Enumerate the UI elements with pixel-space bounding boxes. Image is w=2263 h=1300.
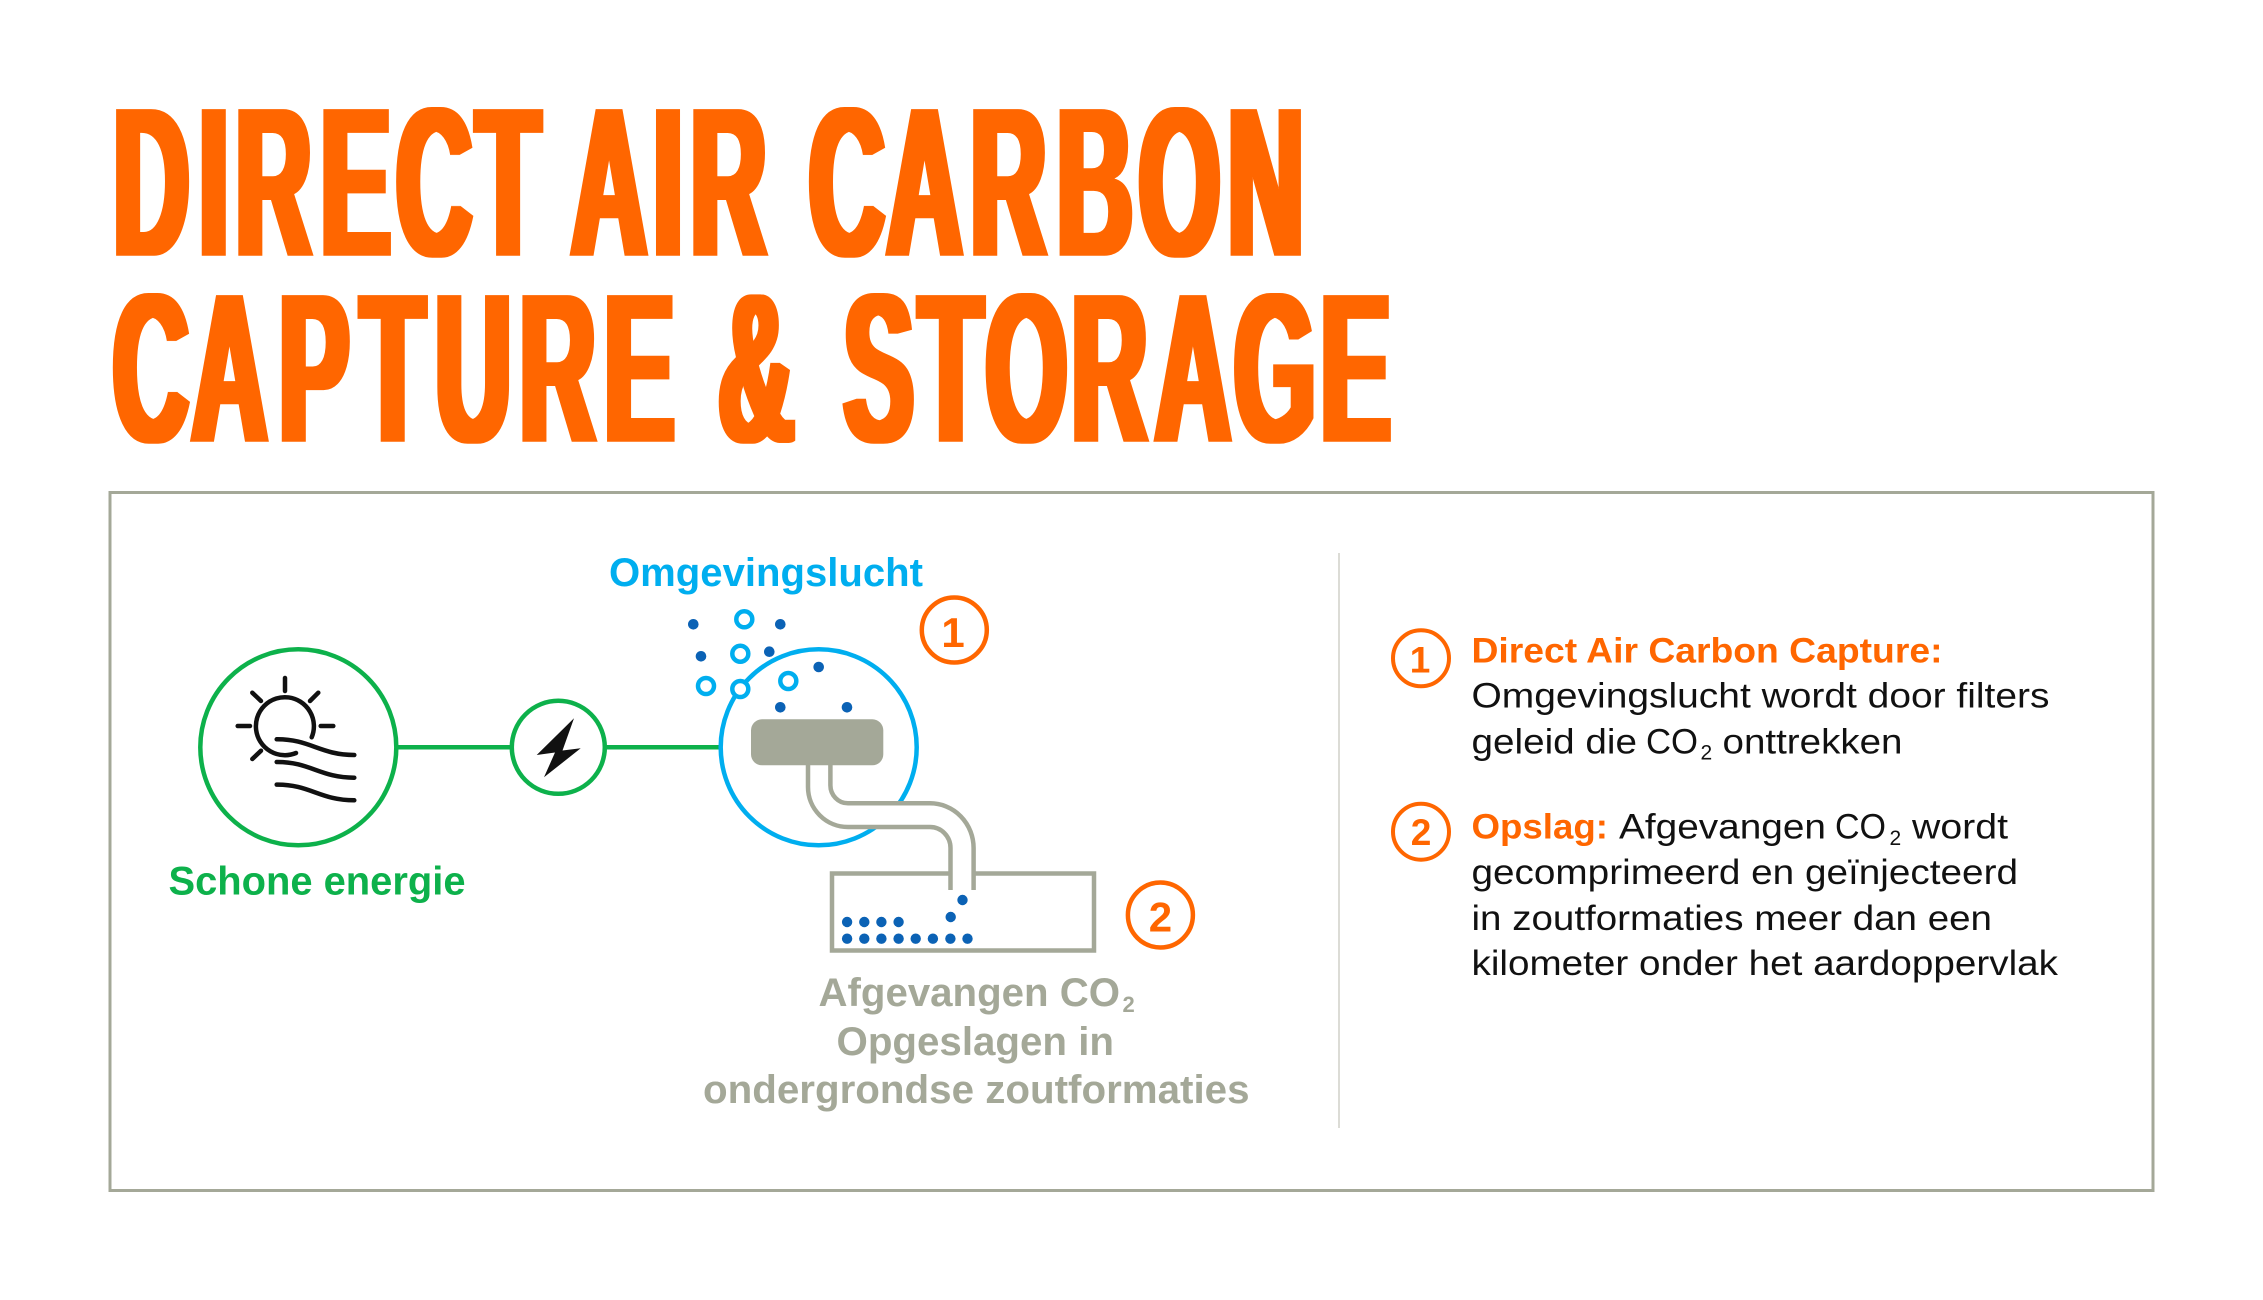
icon: clean energy circle with sun and wind bbox=[200, 649, 396, 845]
legend text 1: direct air carbon capture: geleid die bbox=[1472, 722, 1637, 761]
legend text 2: storage: CO bbox=[1835, 808, 1886, 847]
caption: captured CO2 stored underground: ondergrondse zoutformaties bbox=[703, 1068, 1250, 1112]
caption: captured CO2 stored underground: 2 bbox=[1122, 992, 1135, 1017]
caption: captured CO2 stored underground: Afgevangen CO bbox=[818, 971, 1120, 1015]
legend text 2: storage: Afgevangen bbox=[1619, 808, 1826, 847]
legend text 1: direct air carbon capture: CO bbox=[1646, 722, 1698, 761]
badge 1 on diagram: 1 bbox=[941, 609, 965, 656]
pipe from filter to storage bbox=[808, 765, 974, 890]
legend text 1: direct air carbon capture: onttrekken bbox=[1722, 722, 1902, 761]
legend text 1: direct air carbon capture: Direct Air Carbon Capture: bbox=[1472, 631, 1942, 670]
legend text 1: direct air carbon capture: Omgevingslucht wordt door filters bbox=[1472, 677, 2050, 716]
legend text 2: storage: Opslag: bbox=[1472, 808, 1608, 847]
legend text 2: storage bbox=[1472, 808, 2059, 983]
badge 1 on diagram bbox=[922, 598, 987, 662]
panel: diagram frame bbox=[110, 492, 2153, 1190]
legend text 2: storage: gecomprimeerd en geïnjecteerd bbox=[1472, 853, 2018, 892]
badge 2 in legend bbox=[1393, 804, 1449, 860]
legend text 2: storage: kilometer onder het aardoppervlak bbox=[1472, 944, 2059, 983]
title: CAPTURE & STORAGE bbox=[113, 249, 1390, 487]
title bbox=[113, 63, 1390, 487]
legend text 2: storage: wordt bbox=[1911, 808, 2008, 847]
filter block bbox=[751, 719, 883, 765]
caption: captured CO2 stored underground: Opgeslagen in bbox=[836, 1020, 1114, 1064]
label: clean energy: Schone energie bbox=[168, 860, 466, 904]
capture unit circle bbox=[721, 649, 917, 845]
badge 1 in legend bbox=[1393, 630, 1449, 686]
badge 2 in legend: 2 bbox=[1411, 812, 1431, 853]
legend text 1: direct air carbon capture bbox=[1472, 631, 2050, 764]
title: DIRECT AIR CARBON bbox=[114, 63, 1303, 301]
badge 1 in legend: 1 bbox=[1410, 639, 1430, 680]
label: ambient air: Omgevingslucht bbox=[609, 551, 923, 595]
badge 2 on diagram bbox=[1128, 882, 1193, 948]
legend text 2: storage: in zoutformaties meer dan een bbox=[1472, 899, 1992, 938]
icon: lightning bolt circle bbox=[512, 701, 605, 794]
badge 2 on diagram: 2 bbox=[1149, 894, 1172, 941]
legend text 2: storage: 2 bbox=[1890, 827, 1901, 850]
air particles bbox=[688, 611, 852, 713]
caption: captured CO2 stored underground bbox=[703, 971, 1250, 1112]
legend text 1: direct air carbon capture: 2 bbox=[1700, 742, 1712, 764]
storage reservoir bbox=[832, 874, 1094, 950]
